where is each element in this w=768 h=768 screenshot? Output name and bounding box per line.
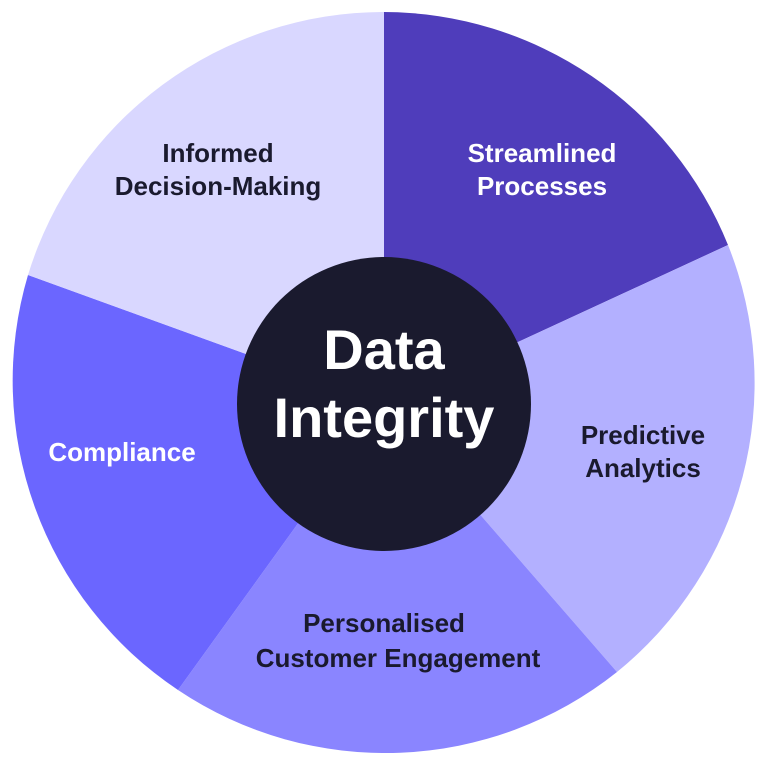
label: predictive analytics: Analytics [585, 453, 701, 483]
segment: streamlined processes [384, 12, 728, 404]
label: streamlined processes: Streamlined [468, 138, 616, 168]
label: predictive analytics: Predictive [581, 420, 705, 450]
segment: compliance [13, 275, 384, 690]
label: informed decision-making: Decision-Making [115, 171, 321, 201]
center circle: data integrity [237, 257, 531, 551]
label: informed decision-making: Informed [162, 138, 274, 168]
label: personalised customer engagement: Personalised [303, 608, 465, 638]
label: streamlined processes: Processes [477, 171, 607, 201]
label: compliance: Compliance [48, 437, 196, 467]
center title: Integrity [274, 386, 494, 449]
center title: Data [323, 318, 446, 381]
segment: informed decision-making [28, 12, 384, 404]
segment: predictive analytics [384, 245, 755, 672]
segment: personalised customer engagement [178, 404, 617, 753]
label: personalised customer engagement: Customer Engagement [256, 643, 541, 673]
